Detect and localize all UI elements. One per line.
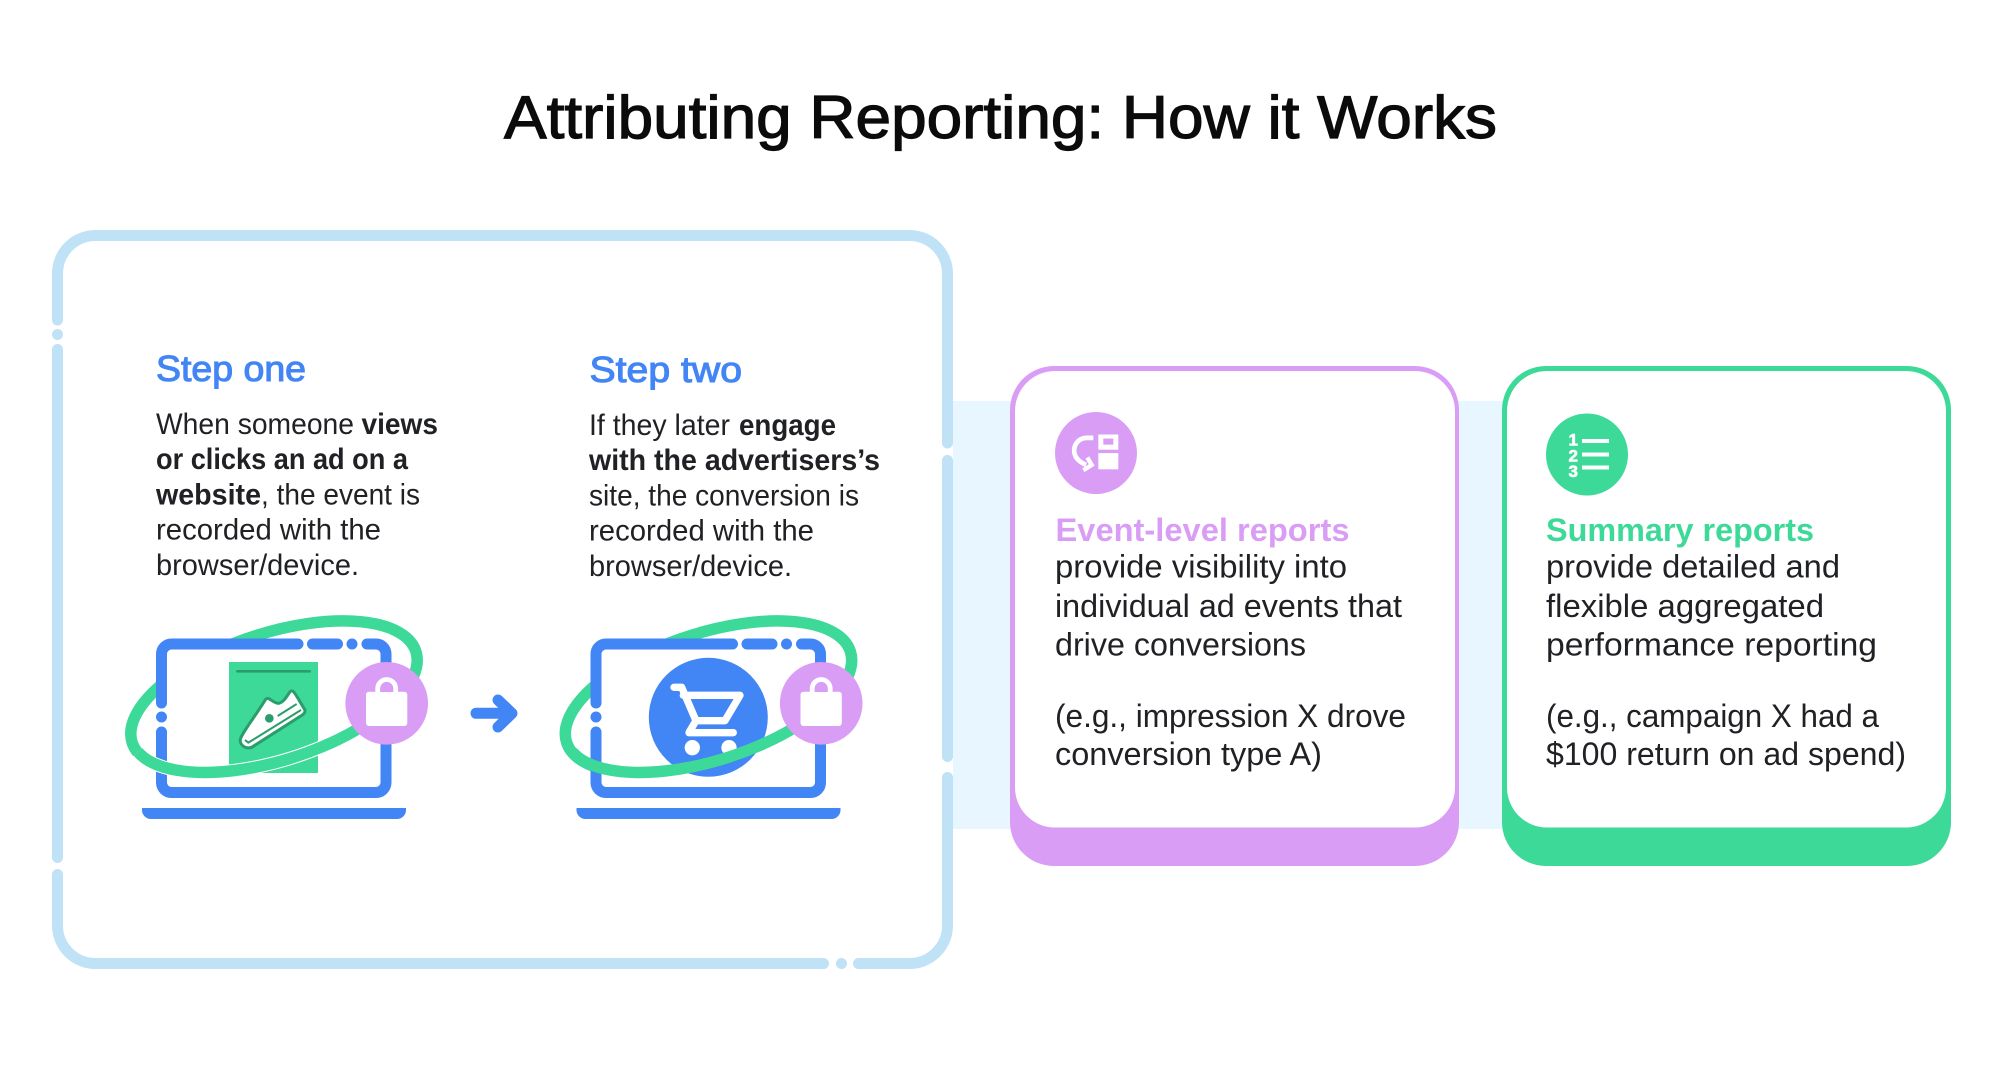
text: step two description: browser/device. <box>589 550 792 583</box>
text: step two description: with the advertisers’s <box>588 444 880 477</box>
text: event-level description <box>1055 548 1406 772</box>
panel: summary reports <box>1502 366 1951 866</box>
text: step one description: or clicks an ad on a <box>156 443 408 476</box>
icon: laptop with shopping cart <box>547 591 870 819</box>
text: step two description: If they later <box>589 409 730 442</box>
text: step one description: browser/device. <box>156 549 359 582</box>
icon: cart circle <box>649 658 768 777</box>
icon: event-level report <box>1055 412 1137 494</box>
heading: step one: Step one <box>156 348 306 389</box>
text: event-level description: conversion type A) <box>1055 736 1322 772</box>
heading: event-level reports: Event-level reports <box>1056 512 1350 548</box>
icon: shopping bag badge <box>780 662 862 745</box>
text: step two description: site, the conversion is <box>589 480 859 512</box>
icon: summary report list: 3 <box>1568 462 1578 481</box>
text: step two description <box>588 409 880 583</box>
text: event-level description: (e.g., impression X drove <box>1055 698 1406 734</box>
text: summary description: provide detailed and <box>1546 548 1840 584</box>
connector band behind the report cards <box>948 401 1508 829</box>
text: summary description <box>1546 548 1906 772</box>
text: summary description: flexible aggregated <box>1546 588 1824 624</box>
icon: sneaker <box>240 691 305 748</box>
arrow: step one to step two <box>476 700 512 727</box>
panel: event-level reports <box>1010 366 1459 866</box>
text: event-level description: individual ad events that <box>1055 588 1402 624</box>
title: Attributing Reporting: How it Works <box>504 84 1497 151</box>
text: event-level description: drive conversions <box>1055 626 1306 662</box>
icon: laptop with shoe ad <box>113 591 435 819</box>
text: summary description: performance reporting <box>1546 626 1877 662</box>
icon: summary report list: 1 <box>1568 430 1578 450</box>
text: step one description: website <box>155 478 261 512</box>
heading: step two: Step two <box>590 349 742 390</box>
text: summary description: $100 return on ad spend) <box>1546 736 1906 772</box>
panel border <box>52 236 948 969</box>
text: event-level description: provide visibility into <box>1055 548 1347 584</box>
text: summary description: (e.g., campaign X had a <box>1546 698 1880 734</box>
icon: summary report list <box>1546 414 1628 496</box>
text: step one description: views <box>362 408 438 441</box>
text: step one description: When someone <box>156 408 354 441</box>
text: step two description: engage <box>739 409 836 442</box>
panel: measurement steps <box>52 230 953 969</box>
text: step one description <box>155 408 438 582</box>
icon: summary report list: 2 <box>1568 446 1578 466</box>
icon: shopping bag badge <box>345 662 428 745</box>
text: step one description: , the event is <box>261 478 420 512</box>
heading: summary reports: Summary reports <box>1546 512 1814 548</box>
text: step two description: recorded with the <box>589 514 814 548</box>
text: step one description: recorded with the <box>156 514 381 546</box>
